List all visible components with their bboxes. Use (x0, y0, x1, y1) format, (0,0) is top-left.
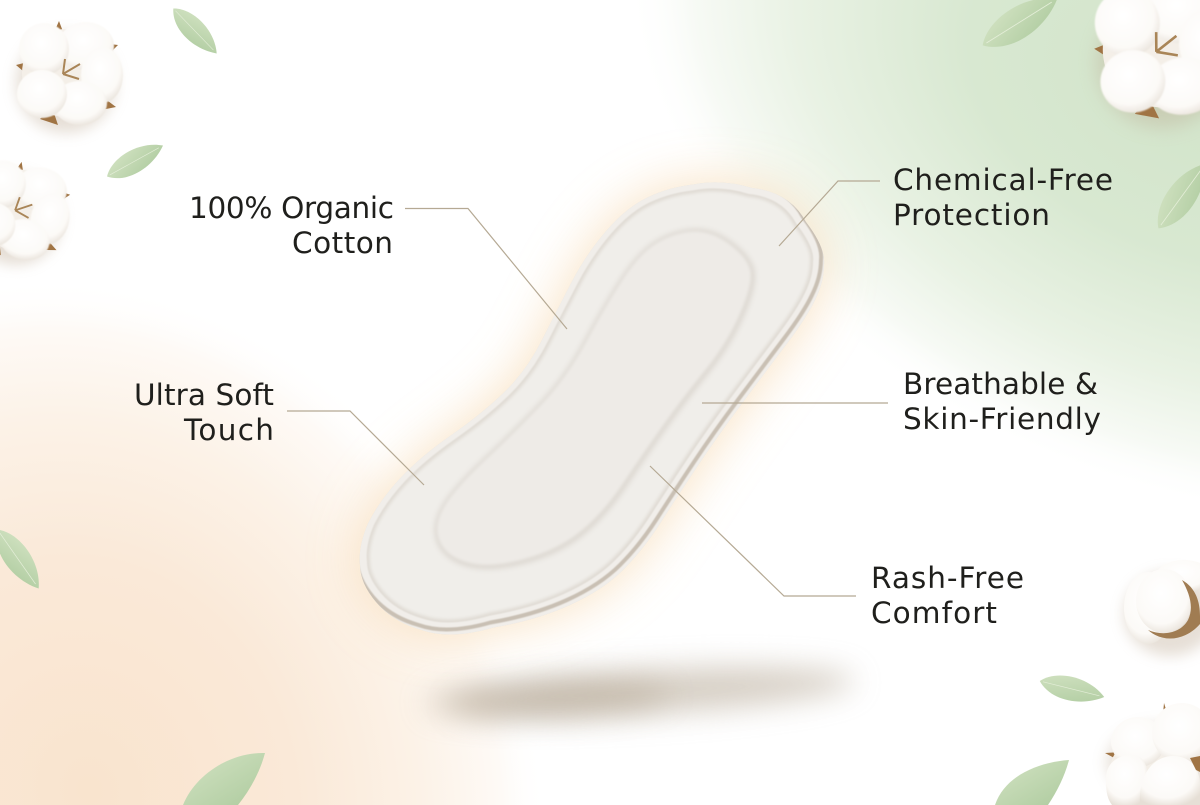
callout: Ultra Soft Touch (134, 378, 424, 485)
icon: leaf 1 (165, 1, 225, 61)
callout: Rash-Free Comfort (650, 466, 1024, 630)
callout: 100% Organic Cotton: Cotton (292, 226, 393, 260)
icon: leaf 7 (1037, 669, 1107, 709)
icon: cotton boll bottom right (1105, 703, 1200, 805)
callout: Chemical-Free Protection: Protection (893, 198, 1050, 232)
icon: leaf 8 (995, 760, 1069, 805)
callout: Chemical-Free Protection: Chemical-Free (893, 163, 1113, 197)
icon: cotton boll right (1124, 560, 1200, 656)
callout: 100% Organic Cotton: 100% Organic (189, 191, 394, 225)
icon: leaf 4 (1147, 155, 1200, 237)
callout: Chemical-Free Protection (779, 163, 1113, 246)
icon: cotton boll top right (1086, 0, 1200, 136)
callout: Breathable & Skin-Friendly: Skin-Friendly (903, 402, 1101, 436)
icon: cotton boll left (0, 154, 79, 275)
callout: Breathable & Skin-Friendly (702, 367, 1101, 436)
callout: Ultra Soft Touch: Ultra Soft (134, 378, 274, 412)
callout: 100% Organic Cotton (189, 191, 567, 329)
sanitary pad (357, 177, 824, 634)
icon: leaf 2 (101, 136, 169, 186)
callout: Breathable & Skin-Friendly: Breathable & (903, 367, 1098, 401)
callout: Rash-Free Comfort: Rash-Free (871, 561, 1024, 595)
icon: leaf 6 (183, 753, 265, 805)
icon: leaf 5 (0, 522, 49, 596)
icon: cotton boll top left (16, 21, 123, 133)
callout: Ultra Soft Touch: Touch (183, 413, 274, 447)
callout: Rash-Free Comfort: Comfort (871, 596, 997, 630)
icon: leaf 3 (974, 0, 1066, 59)
pad shadow (424, 659, 856, 725)
